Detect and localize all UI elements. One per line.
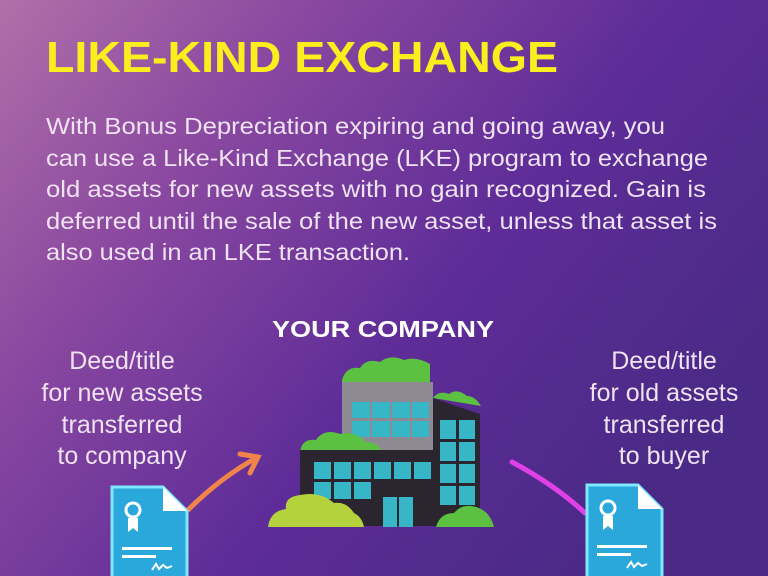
left greenery [300, 432, 382, 452]
left label: for new assets [41, 379, 203, 407]
right label: to buyer [619, 442, 709, 470]
arrow: orange to company [188, 454, 258, 510]
right label: for old assets [590, 379, 738, 407]
title: LIKE-KIND EXCHANGE [46, 33, 558, 82]
tower greenery [433, 391, 481, 406]
roof greenery top [342, 357, 430, 384]
heading: your company: YOUR COMPANY [272, 316, 494, 342]
bushes [268, 494, 364, 527]
left label: Deed/title [69, 347, 175, 375]
dark lower block [300, 450, 440, 526]
icon: left document [112, 487, 187, 576]
left label: to company [57, 442, 187, 470]
body text [46, 113, 717, 265]
icon: right document [587, 485, 662, 576]
body text: old assets for new assets with no gain recognized. Gain is [46, 176, 706, 202]
right label: transferred [604, 411, 724, 439]
grey block [342, 382, 433, 454]
arrow: magenta line to buyer [512, 462, 585, 513]
body text: also used in an LKE transaction. [46, 239, 410, 265]
right label [590, 347, 738, 470]
body text: can use a Like-Kind Exchange (LKE) program to exchange [46, 145, 708, 171]
right label: Deed/title [611, 347, 717, 375]
body text: With Bonus Depreciation expiring and going away, you [46, 113, 665, 139]
dark tower [433, 398, 480, 526]
left label: transferred [62, 411, 182, 439]
left label [41, 347, 203, 470]
body text: deferred until the sale of the new asset, unless that asset is [46, 208, 717, 234]
icon: building [268, 357, 494, 527]
